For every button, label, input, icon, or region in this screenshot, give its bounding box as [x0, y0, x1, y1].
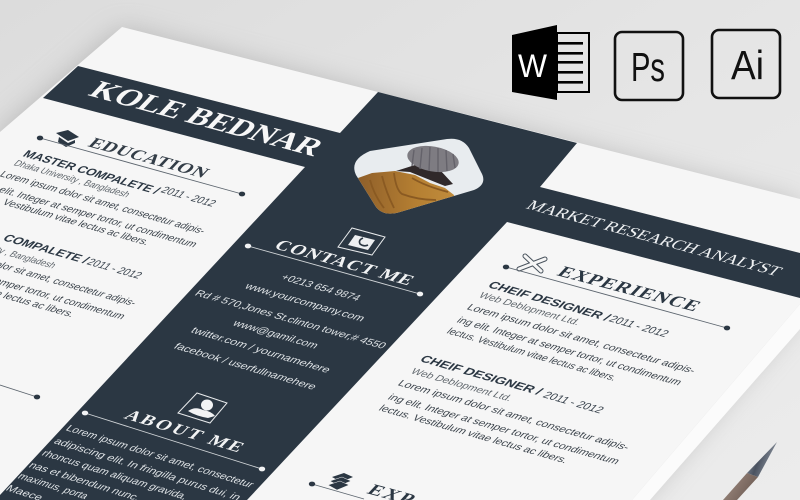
pen tip — [747, 442, 777, 477]
experience entry 2: Lorem ipsum dolor sit amet, consectetur adipis- — [395, 379, 632, 453]
photo hat — [407, 146, 459, 172]
pen barrel — [723, 473, 758, 500]
about text: Lorem ipsum dolor sit amet, consectetur — [63, 424, 256, 490]
about heading: ABOUT ME — [120, 407, 249, 455]
education entry 1: 2011 - 2012 — [158, 184, 219, 209]
contact details: +0213 654 9874 — [278, 273, 363, 303]
experience entry 2 — [376, 353, 632, 467]
experience entry 1: 2011 - 2012 — [606, 313, 672, 339]
contact details: twitter.com / yournamehere — [188, 326, 333, 375]
education entry 1: Dhaka University , Bangladesh — [11, 159, 133, 200]
pen — [723, 442, 777, 500]
photo jacket — [358, 171, 454, 218]
icon: stacked layers — [328, 473, 353, 490]
about divider — [82, 411, 265, 471]
icon: photoshop: Ps — [631, 44, 665, 90]
photo — [354, 139, 483, 218]
icon: illustrator: Ai — [731, 42, 764, 88]
contact details: facebook / userfullnamehere — [171, 342, 319, 392]
page edge — [632, 304, 800, 500]
about text — [3, 424, 256, 500]
contact divider — [245, 244, 423, 296]
panel: experience — [376, 256, 730, 467]
experience entry 1: ing elit. Integer at semper tortor, ut condimentum — [454, 316, 684, 388]
panel: lower section — [309, 473, 419, 500]
experience entry 1: CHEIF DESIGNER / — [485, 279, 614, 323]
lower divider — [309, 482, 364, 499]
experience entry 1: lectus. Vestibulum vitae lectus ac libers. — [444, 327, 619, 383]
icon: word — [512, 25, 589, 100]
experience entry 2: ing elit. Integer at semper tortor, ut condimentum — [385, 393, 622, 467]
icon: word: W — [518, 48, 548, 84]
experience divider — [503, 265, 730, 330]
icon: contact book — [338, 228, 385, 255]
education entry 2: COMPALETE / — [0, 232, 92, 266]
education divider — [37, 136, 245, 196]
panel: contact me — [171, 228, 423, 392]
icon: crossed tools — [519, 256, 545, 271]
experience heading: EXPERIENCE — [553, 264, 705, 315]
experience entry 2: lectus. Vestibulum vitae lectus ac libers. — [376, 404, 571, 465]
panel: about me — [3, 393, 265, 500]
lower left divider — [0, 385, 40, 399]
contact details: www@gamil.com — [229, 318, 321, 351]
experience entry 2: 2011 - 2012 — [540, 389, 607, 416]
education entry 2: 2011 - 2012 — [84, 256, 145, 281]
experience entry 2: CHEIF DESIGNER / — [417, 353, 546, 397]
experience entry 1: Lorem ipsum dolor sit amet, consectetur adipis- — [464, 303, 698, 376]
photo scarf — [396, 165, 453, 186]
contact details: Rd # 570,Jones St.clinton tower,# 4550 — [192, 289, 389, 351]
icon: person — [178, 393, 227, 423]
education entry 1 — [0, 148, 219, 250]
contact heading: CONTACT ME — [270, 237, 419, 288]
contact details: www.yourcompany.com — [241, 281, 367, 324]
job title: MARKET RESEARCH ANALYST — [522, 197, 787, 279]
education entry 1: MASTER COMPALETE / — [20, 148, 163, 196]
panel: education — [0, 130, 245, 399]
experience entry 1: Web Deblopment Ltd. — [476, 291, 583, 327]
education entry 1: Lorem ipsum dolor sit amet, consectetur adipis- — [0, 170, 208, 236]
name: KOLE BEDNAR — [82, 75, 332, 161]
photo jacket folds — [370, 173, 448, 208]
about text: adipiscing elit. In fringilla purus dui, in — [51, 437, 243, 500]
experience entry 2: Web Deblopment Ltd. — [408, 367, 515, 403]
icon: photoshop — [615, 32, 683, 100]
contact details — [171, 273, 389, 392]
experience entry 1 — [444, 279, 698, 388]
icon: illustrator — [712, 30, 780, 98]
icon: graduation cap — [56, 130, 79, 147]
education heading: EDUCATION — [84, 135, 214, 181]
